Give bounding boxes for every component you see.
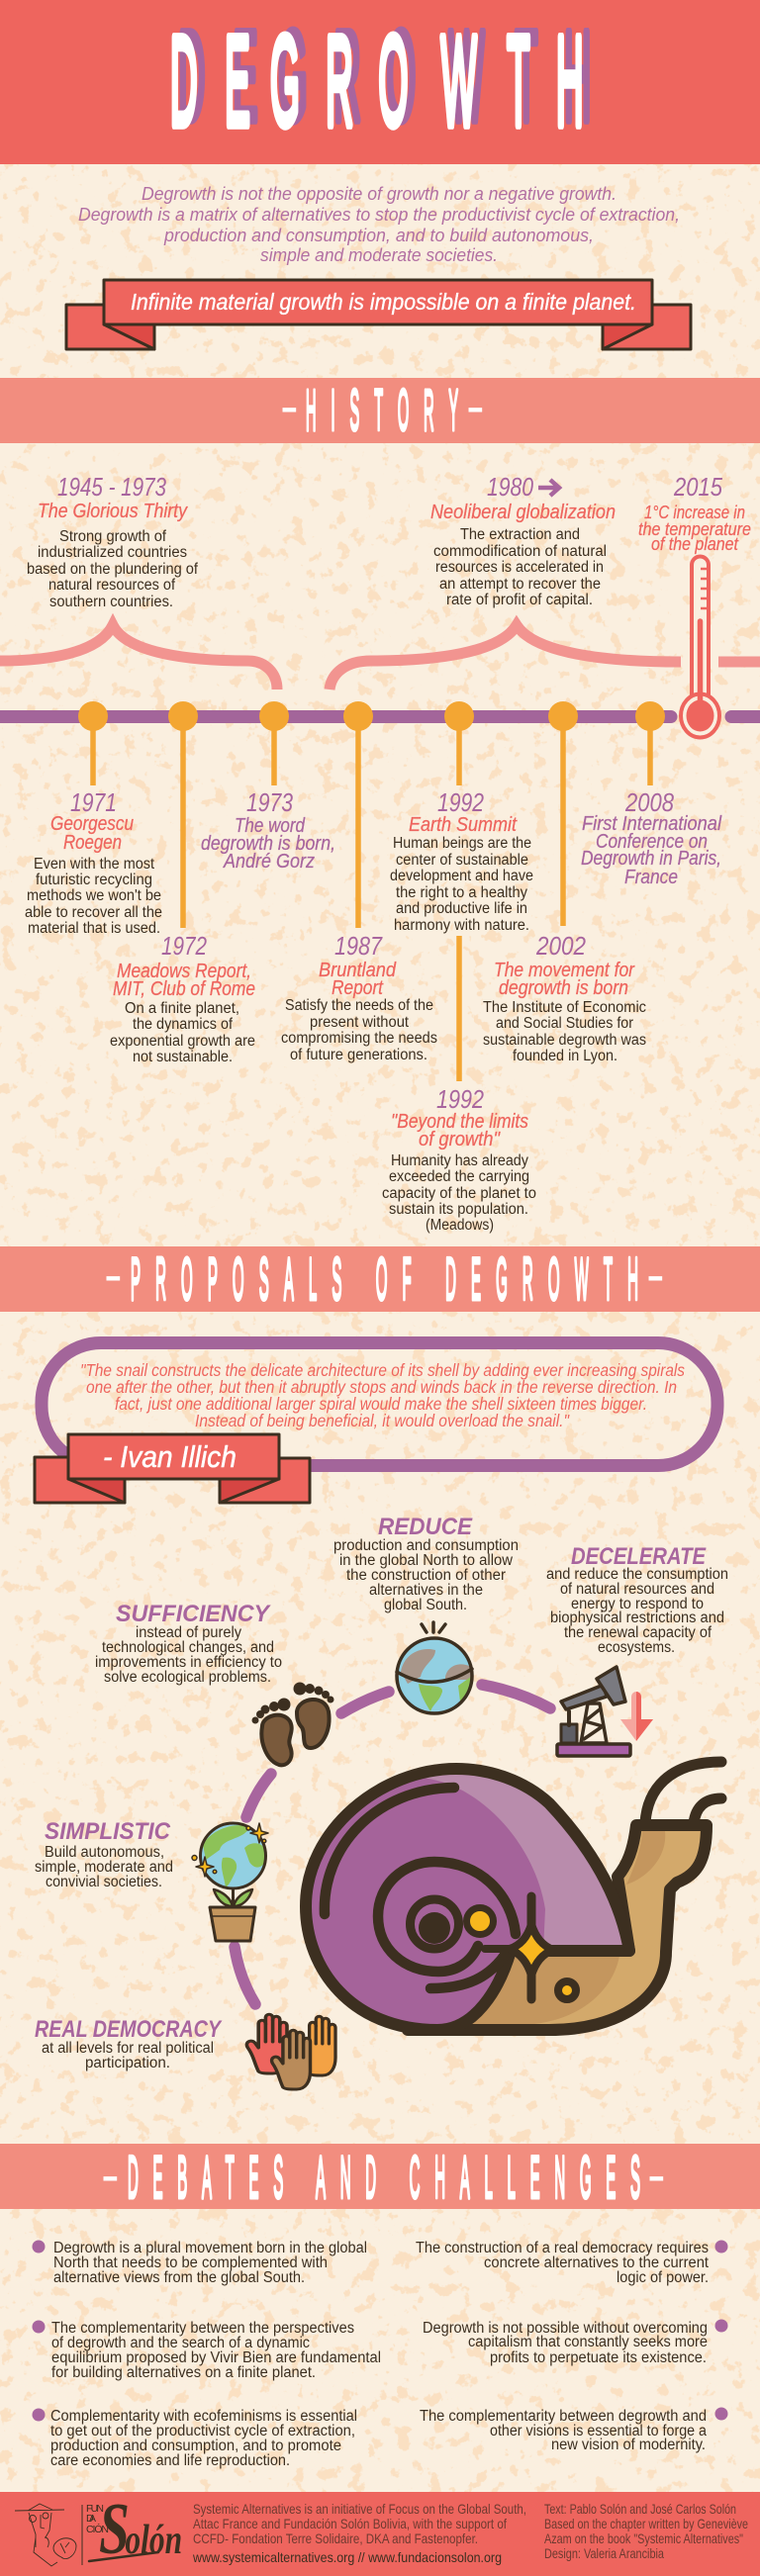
proposal: reduce: the construction of other [346,1567,506,1584]
event: 1992 earth summit: Human beings are the [393,835,531,852]
block: 2015: of the planet [651,534,739,554]
intro text: Degrowth is not the opposite of growth nor a negative growth. [142,184,617,204]
event: 1992 earth summit: the right to a healthy [396,884,527,901]
event: 1971: methods we won't be [27,887,161,904]
event: 1971: 1971 [70,787,117,817]
icon: oil pump with down arrow [557,1667,653,1756]
event: 1973: degrowth is born, [201,832,335,855]
intro text: simple and moderate societies. [260,245,498,265]
section band: history: - [280,374,299,436]
section band: debates and challenges: - [101,2143,120,2205]
debates right column: logic of power. [617,2269,709,2286]
snail eye [558,1981,576,1999]
intro text [78,184,680,265]
timeline bar [0,710,760,723]
quote text: fact, just one additional larger spiral would make the shell sixteen times bigger. [115,1394,647,1414]
icon: globe reduced [397,1622,475,1713]
event: 1971 [25,787,162,937]
event: 1987 [281,931,437,1063]
event: 1992 earth summit: center of sustainable [396,852,528,869]
section band: history: - [466,374,485,436]
proposal: simplistic [35,1818,173,1890]
block: 1945-1973: natural resources of [48,577,176,594]
event: 1992 beyond the limits: "Beyond the limits [391,1110,528,1133]
ribbon banner: key message [66,280,691,349]
block: 1980 neoliberal globalization [430,472,616,608]
event: 1992 beyond the limits [382,1084,536,1234]
event: 2008: Degrowth in Paris, [581,847,721,870]
cycle arc dashes [235,1685,550,2004]
proposal: reduce: alternatives in the [369,1582,483,1599]
debate bullets [32,2240,728,2422]
event: 2008: First International [582,812,722,835]
proposal: reduce: in the global North to allow [339,1552,514,1569]
quote text: Instead of being beneficial, it would overload the snail." [195,1411,570,1430]
section band: history: HISTORY [306,378,458,442]
event: 1971: able to recover all the [25,904,162,921]
debates left column: Complementarity with ecofeminisms is essential [50,2408,357,2425]
event: 1972: not sustainable. [133,1049,233,1065]
event: 1987: compromising the needs [281,1030,437,1047]
event: 1992 beyond the limits: sustain its population. [389,1201,528,1218]
event: 2002: and Social Studies for [496,1015,633,1032]
intro text: Degrowth is a matrix of alternatives to stop the productivist cycle of extraction, [78,205,680,225]
footer credits [192,2501,748,2565]
logo: Fundación Solón: DA [86,2513,96,2525]
event: 1992 beyond the limits: exceeded the carrying [389,1168,529,1185]
icon: footprints [251,1682,334,1765]
section band: history [0,374,760,443]
event: 1992 beyond the limits: of growth" [419,1128,502,1150]
event: 1992 beyond the limits: 1992 [436,1084,484,1114]
ribbon: Ivan Illich: - Ivan Illich [103,1439,237,1474]
debates right column: profits to perpetuate its existence. [490,2349,707,2366]
block: 1945-1973: Strong growth of [59,528,167,545]
block: 1980 neoliberal globalization: commodification of natural [433,543,607,560]
event: 1973 [201,787,335,873]
title: DEGROWTH: DEGROWTH [178,6,592,147]
proposal: decelerate: and reduce the consumption [546,1566,728,1583]
icon: thermometer [681,556,719,738]
ribbon banner: key message: Infinite material growth is impossible on a finite planet. [131,289,636,315]
event: 1992 beyond the limits: (Meadows) [426,1217,494,1234]
event: 1987: present without [310,1014,410,1031]
event: 1992 earth summit: development and have [390,868,533,884]
event: 2008: 2008 [624,787,674,817]
block: 1980 neoliberal globalization: Neoliberal globalization [430,501,616,523]
proposal: simplistic: SIMPLISTIC [45,1818,171,1845]
event: 1972: On a finite planet, [125,1000,239,1017]
snail illustration [306,1762,721,2030]
quote text [80,1360,685,1430]
block: 1980 neoliberal globalization: The extraction and [460,526,580,543]
block: 1980 neoliberal globalization: resources is accelerated in [435,559,604,576]
brace: neoliberal globalization [330,625,760,690]
proposal: sufficiency: instead of purely [136,1624,241,1641]
header band [0,0,760,164]
snail body [408,1825,707,2030]
footer credits: www.systemicalternatives.org // www.fundacionsolon.org [192,2549,502,2565]
timeline stems and dots [78,701,665,1081]
debates left column: to get out of the productivist cycle of extraction, [50,2423,355,2439]
event: 1992 beyond the limits: Humanity has already [391,1152,528,1169]
proposal: reduce [333,1514,519,1613]
event: 1971: Georgescu [50,812,134,835]
title: DEGROWTH: DEGROWTH [170,11,584,152]
arrow [538,480,559,496]
debates right column: capitalism that constantly seeks more [468,2334,708,2350]
event: 2002: sustainable degrowth was [483,1032,646,1049]
event: 1987: of future generations. [290,1047,428,1063]
event: 1973: 1973 [246,787,293,817]
section band: proposals of degrowth: - [646,1242,665,1305]
event: 2002 [483,931,646,1064]
debates left column: care economies and life reproduction. [50,2452,290,2469]
snail shell [306,1769,629,2030]
block: 1945-1973: industrialized countries [38,544,187,561]
section band: proposals of degrowth [0,1242,760,1313]
event: 1992 earth summit: Earth Summit [409,813,518,836]
event: 1992 beyond the limits: capacity of the planet to [382,1185,536,1202]
event: 2002: The movement for [494,959,635,981]
block: 1980 neoliberal globalization: 1980 [487,472,533,502]
event: 1971: futuristic recycling [36,872,152,888]
debates right column: other visions is essential to forge a [490,2423,707,2439]
debates right column: Degrowth is not possible without overcoming [423,2320,708,2337]
star on the snail [526,1896,536,1999]
shell spirals [325,1788,516,1988]
debates left column: The complementarity between the perspectives [51,2320,354,2337]
event: 2008 [581,787,722,888]
event: 2002: The Institute of Economic [483,999,646,1016]
debates left column: of degrowth and the search of a dynamic [51,2335,310,2351]
logo: Fundación Solón [15,2490,182,2570]
block: 1945-1973: based on the plundering of [27,561,199,578]
event: 1987: Report [332,976,384,999]
intro text: production and consumption, and to build autonomous, [163,226,594,245]
block: 2015 [638,472,751,554]
block: 2015: 2015 [673,472,722,502]
event: 2008: France [624,866,678,888]
proposal: decelerate: energy to respond to [571,1596,704,1612]
event: 1972: exponential growth are [110,1033,255,1050]
proposal: decelerate: ecosystems. [598,1639,675,1656]
icon: globe in a plant pot [192,1823,268,1941]
event: 1972: the dynamics of [133,1016,234,1033]
event: 1992 earth summit: 1992 [437,787,484,817]
event: 1971: Roegen [63,831,122,854]
section band: debates and challenges: DEBATES AND CHALLENGES [128,2145,640,2211]
brace: glorious thirty [0,625,277,690]
proposal: simplistic: Build autonomous, [45,1844,164,1861]
proposal: decelerate [546,1543,728,1656]
block: 1980 neoliberal globalization: rate of profit of capital. [446,592,593,608]
block: 1945-1973 [27,472,199,610]
debates right column [416,2240,710,2453]
proposal: decelerate: DECELERATE [571,1543,707,1570]
debates left column: alternative views from the global South. [53,2269,305,2286]
logo: Fundación Solón: CIÓN [86,2523,109,2535]
proposal: reduce: REDUCE [378,1514,473,1540]
footer credits: Attac France and Fundación Solón Bolivia, with the support of [193,2516,507,2531]
section band: debates and challenges [0,2143,760,2211]
proposal: sufficiency [95,1601,282,1686]
proposal: sufficiency: solve ecological problems. [104,1669,271,1686]
event: 1972: Meadows Report, [117,960,251,982]
footer band [0,2490,760,2576]
proposal: sufficiency: improvements in efficiency to [95,1654,282,1671]
footer credits: Design: Valeria Arancibia [544,2545,664,2561]
event: 1972: 1972 [161,931,207,961]
quote frame [42,1343,717,1466]
block: 1945-1973: 1945 - 1973 [57,472,166,502]
proposal: decelerate: the renewal capacity of [564,1624,712,1641]
event: 1987: Satisfy the needs of the [285,997,433,1014]
event: 1972: MIT, Club of Rome [113,977,255,1000]
event: 1987: Bruntland [319,959,397,981]
block: 1980 neoliberal globalization: an attempt to recover the [439,576,601,593]
proposal: sufficiency: SUFFICIENCY [116,1601,271,1627]
proposal: reduce: global South. [384,1597,467,1613]
debates left column: Degrowth is a plural movement born in the global [53,2240,367,2256]
logo: Fundación Solón: Solón [99,2490,182,2570]
debates left column: equilibrium proposed by Vivir Bien are fundamental [51,2349,381,2366]
proposal: reduce: production and consumption [333,1537,519,1554]
block: 1945-1973: The Glorious Thirty [38,500,189,522]
proposal: real democracy: participation. [85,2055,170,2071]
event: 2008: Conference on [596,830,708,853]
proposal: real democracy [35,2016,223,2071]
event: 1987: 1987 [334,931,383,961]
event: 2002: 2002 [535,931,586,961]
debates right column: The construction of a real democracy requires [416,2240,709,2256]
ribbon: Ivan Illich [35,1434,310,1503]
event: 1992 earth summit [390,787,533,934]
block: 1945-1973: southern countries. [49,594,173,610]
event: 1973: The word [235,814,305,837]
event: 1973: André Gorz [222,850,315,873]
proposal: real democracy: at all levels for real political [42,2040,214,2057]
section band: proposals of degrowth: - [104,1242,123,1305]
antennae [645,1762,721,1823]
logo: Fundación Solón: FUN [86,2503,104,2515]
footer credits: Systemic Alternatives is an initiative of Focus on the Global South, [193,2501,526,2517]
event: 1992 earth summit: and productive life in [396,900,527,917]
proposal: sufficiency: technological changes, and [102,1639,274,1656]
debates left column [50,2240,381,2469]
proposal: simplistic: simple, moderate and [35,1859,173,1876]
event: 1972 [110,931,255,1065]
debates right column: new vision of modernity. [551,2437,706,2453]
event: 2002: founded in Lyon. [513,1048,618,1064]
footer credits: CCFD- Fondation Terre Solidaire, DKA and Fastenopfer. [193,2530,478,2546]
event: 1971: Even with the most [34,856,155,873]
debates left column: production and consumption, and to promote [50,2438,341,2454]
debates right column: The complementarity between degrowth and [420,2408,707,2425]
section band: debates and challenges: - [647,2143,666,2205]
proposal: decelerate: of natural resources and [560,1581,714,1598]
section band: proposals of degrowth: PROPOSALS OF DEGROWTH [131,1246,638,1313]
proposal: real democracy: REAL DEMOCRACY [35,2016,223,2043]
event: 1971: material that is used. [28,920,160,937]
debates right column: concrete alternatives to the current [484,2254,710,2271]
event: 1992 earth summit: harmony with nature. [394,917,529,934]
quote text: one after the other, but then it abruptly stops and winds back in the reverse direction. In [86,1377,677,1397]
quote text: "The snail constructs the delicate architecture of its shell by adding ever increasing spirals [80,1360,685,1380]
debates left column: North that needs to be complemented with [53,2254,328,2271]
proposal: decelerate: biophysical restrictions and [550,1610,724,1626]
icon: raised hands [246,2014,335,2089]
proposal: simplistic: convivial societies. [46,1874,162,1890]
debates left column: for building alternatives on a finite planet. [51,2364,316,2381]
event: 2002: degrowth is born [499,976,628,999]
